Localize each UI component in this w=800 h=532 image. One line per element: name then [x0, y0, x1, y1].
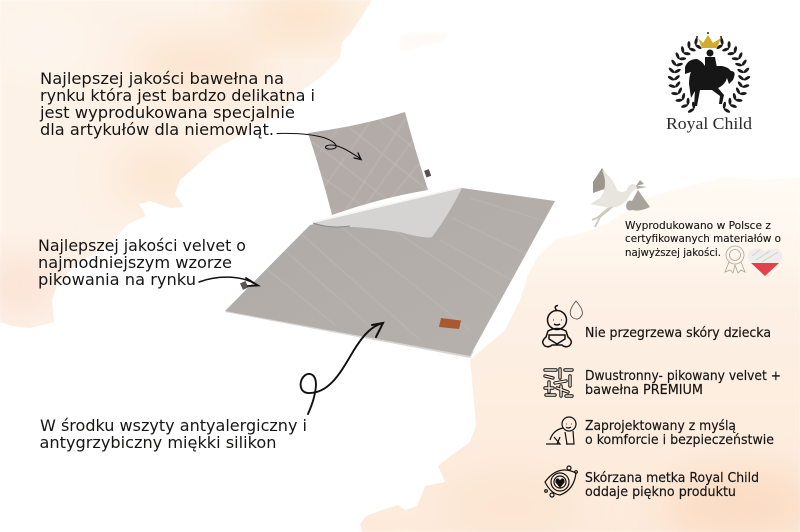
- icon: crawling baby: [546, 417, 576, 444]
- arrow: to blanket: [199, 277, 258, 286]
- background: watercolor wash right: [350, 170, 800, 532]
- text: leather tag: Skórzana metka Royal Child: [585, 470, 759, 486]
- text: double sided: bawełna PREMIUM: [585, 383, 703, 398]
- leather tag: [439, 318, 461, 329]
- side tag: [240, 281, 248, 290]
- text: silicone: antygrzybiczny miękki silikon: [40, 433, 276, 452]
- arrow: to pillow: [277, 133, 361, 160]
- icon: baby with drop: [543, 301, 582, 347]
- blanket fold lining: [313, 188, 462, 237]
- text: made in Poland: certyfikowanych materiałów o: [625, 233, 781, 245]
- icon: eye with heart: [545, 466, 577, 497]
- text: silicone: W środku wszyty antyalergiczny i: [40, 416, 307, 435]
- text: leather tag: oddaje piękno produktu: [585, 485, 736, 500]
- text: made in Poland: [625, 220, 781, 259]
- text: cotton: [39, 69, 315, 139]
- text: leather tag: [585, 470, 759, 500]
- text: double sided: [585, 369, 781, 398]
- icon: certificate rosette: [725, 246, 745, 273]
- text: velvet: Najlepszej jakości velvet o: [38, 236, 246, 255]
- logo laurel wreath: [667, 36, 751, 115]
- arrow: to filling: [301, 323, 383, 414]
- blanket underside edge: [225, 308, 474, 358]
- text: cotton: Najlepszej jakości bawełna na: [40, 69, 284, 88]
- background: faint wash fragment: [400, 32, 448, 52]
- text: cotton: jest wyprodukowana specjalnie: [39, 103, 295, 122]
- text: designed for comfort: o komforcie i bezpieczeństwie: [585, 432, 774, 448]
- fold highlight: [313, 187, 462, 222]
- text: made in Poland: Wyprodukowano w Polsce z: [625, 220, 771, 232]
- text: cotton: dla artykułów dla niemowląt.: [40, 120, 274, 139]
- background: watercolor wash top left: [0, 0, 372, 328]
- icon: woven fabric: [545, 369, 572, 396]
- logo wordmark: Royal Child: [666, 114, 753, 133]
- text: velvet: pikowania na rynku: [38, 270, 196, 289]
- text: no overheating: Nie przegrzewa skóry dziecka: [585, 325, 771, 341]
- text: cotton: rynku która jest bardzo delikatna i: [40, 86, 315, 105]
- text: designed for comfort: Zaprojektowany z myślą: [585, 418, 736, 434]
- icon: Polish flag heart: [748, 248, 782, 276]
- text: velvet: [38, 236, 246, 289]
- text: made in Poland: najwyższej jakości.: [625, 247, 721, 259]
- logo crown: [696, 32, 722, 48]
- logo: Royal Child: [666, 32, 753, 133]
- pillow: [308, 112, 432, 215]
- text: velvet: najmodniejszym wzorze: [38, 253, 232, 272]
- text: double sided: Dwustronny- pikowany velvet +: [585, 369, 781, 384]
- blanket: [225, 187, 555, 358]
- logo horse and rider: [685, 50, 735, 106]
- text: designed for comfort: [585, 418, 774, 448]
- icon: stork with bundle: [590, 168, 650, 227]
- pillow tag: [424, 169, 431, 177]
- text: silicone: [40, 416, 307, 452]
